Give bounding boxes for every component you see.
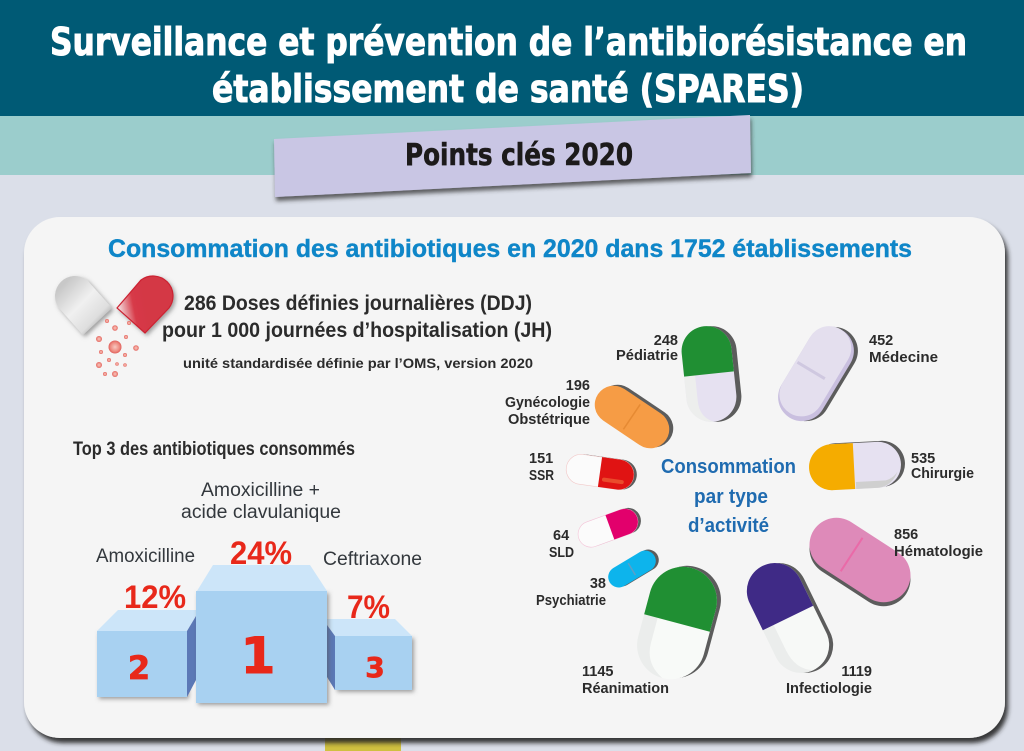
pill: infectiologie <box>737 554 843 682</box>
pill labels: Psychiatrie <box>536 593 606 609</box>
pill labels: Médecine <box>869 350 938 366</box>
pill chart by activity <box>505 318 983 697</box>
pill labels: Pédiatrie <box>616 348 678 364</box>
podium: rank 3: 3 <box>365 651 385 684</box>
teal band <box>0 116 1024 175</box>
panel: consommation des antibiotiques <box>24 217 1005 738</box>
key figure text: pour 1 000 journées d’hospitalisation (JH) <box>162 319 552 342</box>
pill labels: Hématologie <box>894 544 983 560</box>
podium chart <box>96 480 422 703</box>
pill: réanimation <box>629 558 729 687</box>
header band <box>0 0 1024 116</box>
pill labels: 535 <box>911 451 935 467</box>
podium percentages: 24% <box>230 535 292 571</box>
pill labels: 248 <box>654 333 678 349</box>
pill: gynécologie obstétrique <box>587 377 681 456</box>
key figure text: 286 Doses définies journalières (DDJ) <box>184 292 532 315</box>
icon: open capsule with powder <box>55 276 173 377</box>
pill labels: Chirurgie <box>911 466 974 482</box>
pill: SSR <box>564 452 639 492</box>
panel heading: Consommation des antibiotiques en 2020 dans 1752 établissements <box>108 235 912 263</box>
podium labels: Amoxicilline + <box>201 480 320 501</box>
pill labels: SSR <box>529 468 554 484</box>
pill: psychiatrie <box>604 546 663 591</box>
podium labels: acide clavulanique <box>181 502 341 523</box>
podium percentages: 7% <box>347 589 390 625</box>
podium percentages <box>124 535 390 625</box>
podium: rank 2 <box>97 610 196 697</box>
pill labels: Infectiologie <box>786 681 872 697</box>
pill: SLD <box>574 504 645 551</box>
pill labels: Gynécologie <box>505 395 590 411</box>
pill labels: 1145 <box>582 664 613 680</box>
pill labels: 196 <box>566 378 590 394</box>
podium labels: Amoxicilline <box>96 546 195 567</box>
pill labels: Obstétrique <box>508 412 590 428</box>
pill: pédiatrie <box>679 324 744 424</box>
pill labels: 151 <box>529 451 553 467</box>
yellow strip below panel <box>325 738 401 751</box>
podium: rank 3 <box>327 619 412 690</box>
podium labels <box>96 480 422 570</box>
pill: chirurgie <box>808 440 906 491</box>
pill labels: 38 <box>590 576 606 592</box>
centre label: consommation par type d'activité <box>661 455 796 537</box>
pill labels: Réanimation <box>582 681 669 697</box>
pill: médecine <box>769 318 867 430</box>
top 3 heading: Top 3 des antibiotiques consommés <box>73 439 355 460</box>
key figure text <box>162 292 552 371</box>
podium percentages: 12% <box>124 579 186 615</box>
centre label: consommation par type d'activité: d’activité <box>688 514 769 537</box>
pill labels: 64 <box>553 528 569 544</box>
pill: hématologie <box>799 507 921 617</box>
pill labels: SLD <box>549 545 574 561</box>
pill labels <box>505 333 983 697</box>
podium: rank 2: 2 <box>128 649 150 687</box>
pill labels: 452 <box>869 333 893 349</box>
title: établissement de santé (SPARES) <box>212 67 804 111</box>
banner: points clés: Points clés 2020 <box>405 138 633 173</box>
pill labels: 1119 <box>841 664 872 680</box>
centre label: consommation par type d'activité: Consommation <box>661 455 796 478</box>
centre label: consommation par type d'activité: par type <box>694 485 768 508</box>
title <box>50 20 967 111</box>
key figure text: unité standardisée définie par l’OMS, version 2020 <box>183 355 533 371</box>
podium labels: Ceftriaxone <box>323 549 422 570</box>
podium: rank 1 <box>196 565 327 703</box>
pill labels: 856 <box>894 527 918 543</box>
page background <box>0 175 1024 751</box>
podium: rank 1: 1 <box>241 627 275 685</box>
banner: points clés <box>274 115 751 197</box>
